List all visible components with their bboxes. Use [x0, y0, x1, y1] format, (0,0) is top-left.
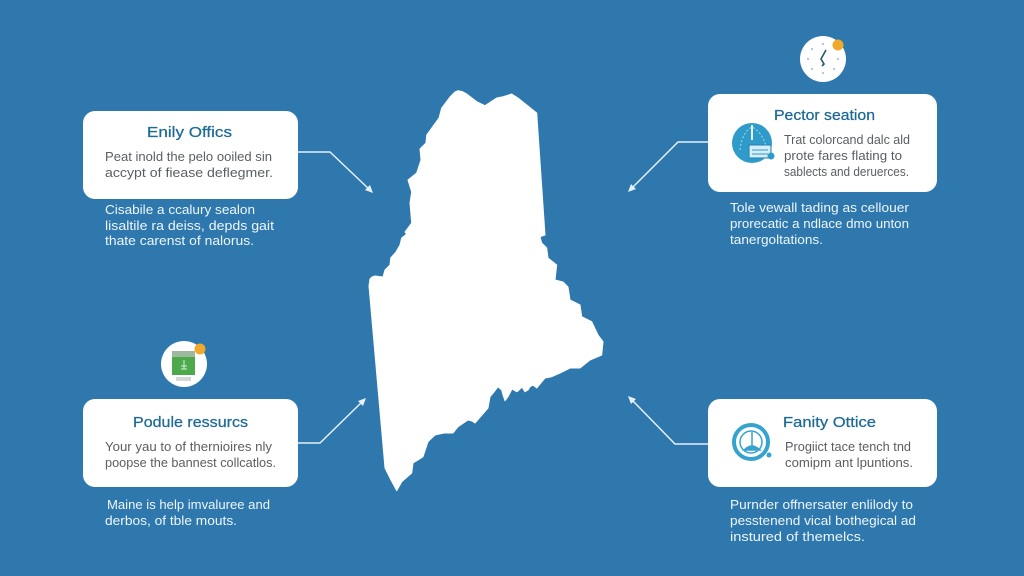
panel: bottom right — [708, 399, 937, 544]
card text: Your yau to of thernioires nly — [105, 440, 273, 454]
caption: thate carenst of nalorus. — [105, 234, 254, 248]
card text — [105, 440, 276, 470]
arrow: top right — [628, 142, 708, 192]
caption — [730, 498, 916, 544]
card text: Trat colorcand dalc ald — [784, 133, 910, 147]
panel: top left — [83, 111, 298, 248]
card text: Peat inold the pelo ooiled sin — [105, 150, 272, 164]
panel: bottom left — [83, 399, 298, 528]
map of Maine — [369, 91, 603, 491]
panel: top right — [708, 94, 937, 247]
card text: Progiict tace tench tnd — [785, 440, 911, 454]
card text: prote fares flating to — [784, 149, 902, 163]
heading: Pector seation — [774, 108, 875, 124]
card text — [785, 440, 913, 470]
card — [83, 399, 298, 487]
card text: poopse the bannest collcatlos. — [105, 456, 276, 470]
icon: document — [732, 123, 774, 163]
arrow: bottom right — [628, 396, 708, 444]
caption: Cisabile a ccalury sealon — [105, 203, 255, 217]
card — [83, 111, 298, 199]
card text — [784, 133, 910, 179]
caption: derbos, of tble mouts. — [105, 514, 237, 528]
icon: wheel badge — [734, 425, 772, 459]
heading: Enily Offics — [147, 125, 232, 141]
arrow: bottom left — [298, 398, 366, 443]
card text: comipm ant lpuntions. — [785, 456, 913, 470]
caption — [730, 201, 909, 247]
icon: green screen — [161, 341, 207, 387]
arrow: top left — [298, 152, 373, 193]
card — [708, 94, 937, 192]
caption: Purnder offnersater enlilody to — [730, 498, 913, 512]
caption: instured of themelcs. — [730, 530, 865, 544]
caption: Maine is help imvaluree and — [107, 498, 270, 512]
card — [708, 399, 937, 487]
caption: Tole vewall tading as cellouer — [730, 201, 909, 215]
card text — [105, 150, 273, 180]
caption: prorecatic a ndlace dmo unton — [730, 217, 909, 231]
card text: accypt of fiease deflegmer. — [105, 166, 273, 180]
caption: lisaltile ra deiss, depds gait — [105, 219, 275, 233]
caption — [105, 498, 270, 528]
card text: sablects and deruerces. — [784, 165, 909, 179]
heading: Podule ressurcs — [133, 415, 248, 431]
caption — [105, 203, 275, 248]
heading: Fanity Ottice — [783, 415, 876, 431]
caption: pesstenend vical bothegical ad — [730, 514, 916, 528]
caption: tanergoltations. — [730, 233, 823, 247]
icon: clock — [800, 36, 846, 82]
